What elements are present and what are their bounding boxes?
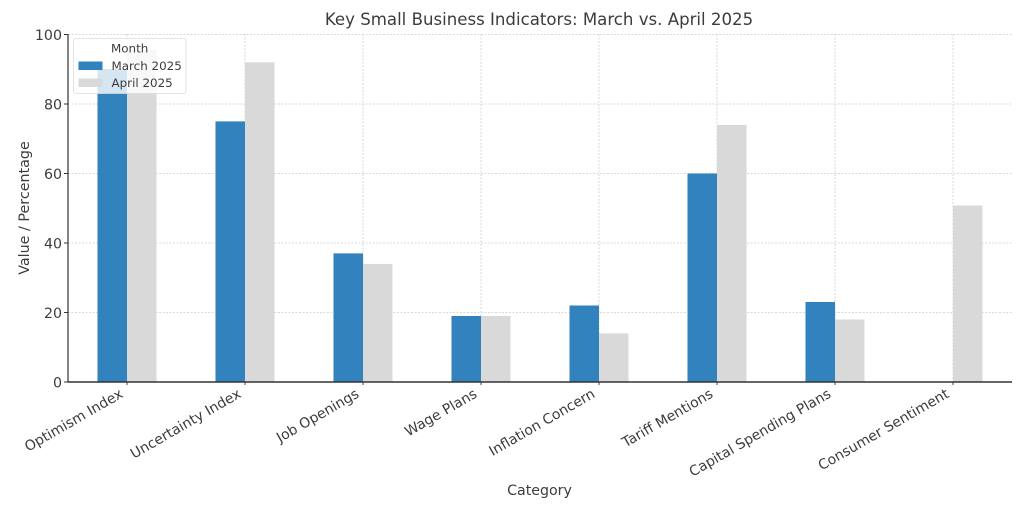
bars: April 2025 <box>127 50 982 382</box>
title: Key Small Business Indicators: March vs. April 2025 <box>325 10 753 29</box>
legend: March 2025 <box>112 59 182 73</box>
x-axis category labels: Optimism Index <box>22 386 126 455</box>
y-axis tick labels: 80 <box>44 98 62 114</box>
x-axis category labels <box>22 386 952 480</box>
x-axis category labels: Job Openings <box>273 386 362 447</box>
bars: March 2025 <box>98 69 835 382</box>
y-axis tick labels: 20 <box>44 306 62 322</box>
x-axis category labels: Wage Plans <box>402 386 480 440</box>
x-axis category labels: Consumer Sentiment <box>816 386 952 474</box>
y-axis title: Value / Percentage <box>17 141 33 275</box>
x-axis category labels: Tariff Mentions <box>619 386 716 452</box>
y-axis tick labels: 100 <box>35 28 62 44</box>
x-axis title: Category <box>507 483 572 499</box>
x-axis category labels: Uncertainty Index <box>128 386 244 462</box>
x-axis category labels: Inflation Concern <box>486 386 598 460</box>
y-axis tick labels: 60 <box>44 167 62 183</box>
legend: April 2025 <box>112 76 173 90</box>
y-axis tick labels: 40 <box>44 236 62 252</box>
y-axis tick labels: 0 <box>53 376 62 392</box>
legend: Month <box>111 42 148 56</box>
x-axis category labels: Capital Spending Plans <box>687 386 834 480</box>
legend <box>74 38 186 94</box>
y-axis tick labels <box>35 28 62 392</box>
